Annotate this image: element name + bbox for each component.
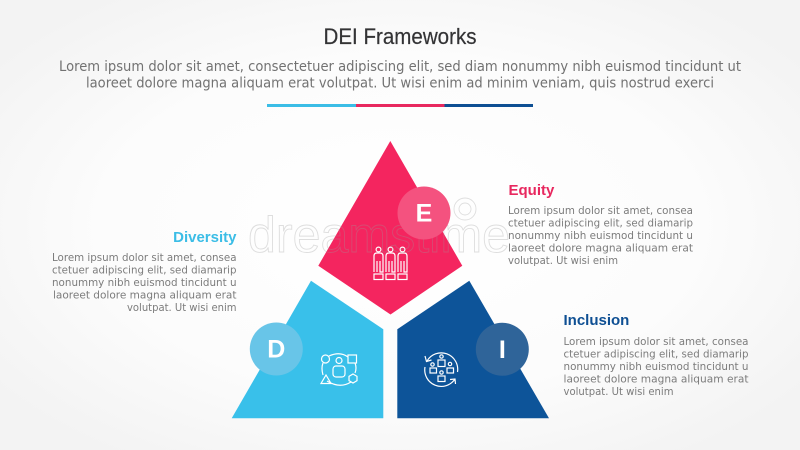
text block: inclusion: Inclusion	[564, 312, 629, 329]
text block: inclusion: volutpat. Ut wisi enim	[564, 386, 674, 398]
text block: equity: nonummy nibh euismod tincidunt u	[508, 230, 693, 242]
text block: inclusion: laoreet dolore magna aliquam erat	[564, 374, 748, 386]
badge: E	[398, 186, 450, 240]
text block: equity: Lorem ipsum dolor sit amet, consea	[508, 205, 693, 217]
subtitle text: laoreet dolore magna aliquam erat volutpat. Ut wisi enim ad minim veniam, quis nostrud exerci	[86, 76, 714, 92]
icon: group in circular arrows	[425, 353, 458, 386]
text block: diversity	[52, 229, 237, 314]
subtitle text	[59, 59, 741, 92]
text block: inclusion: ctetuer adipiscing elit, sed diamarip	[564, 348, 749, 360]
badge: I	[476, 323, 529, 376]
text block: equity: laoreet dolore magna aliquam erat	[508, 242, 693, 254]
icon: three people on blocks	[374, 247, 407, 280]
badge: D: D	[267, 336, 285, 364]
text block: inclusion: nonummy nibh euismod tincidunt u	[564, 361, 748, 373]
title: DEI Frameworks	[324, 24, 476, 49]
icon: shapes around a person	[321, 354, 357, 385]
text block: diversity: Diversity	[173, 229, 237, 246]
text block: equity	[508, 182, 693, 267]
text block: inclusion	[564, 312, 749, 398]
panel: inclusion segment	[397, 281, 549, 418]
text block: diversity: volutpat. Ut wisi enim	[127, 302, 236, 314]
panel: equity segment	[318, 141, 462, 314]
badge: E: E	[416, 200, 432, 228]
text block: diversity: ctetuer adipiscing elit, sed diamarip	[52, 264, 237, 276]
tri-colour divider	[267, 104, 533, 107]
panel: diversity segment	[232, 281, 383, 418]
text block: equity: ctetuer adipiscing elit, sed diamarip	[508, 218, 693, 230]
text block: diversity: Lorem ipsum dolor sit amet, consea	[52, 252, 236, 264]
text block: diversity: laoreet dolore magna aliquam erat	[53, 290, 236, 302]
text block: diversity: nonummy nibh euismod tincidunt u	[52, 277, 236, 289]
watermark: dreamstime	[248, 207, 510, 263]
badge: D	[250, 322, 303, 376]
text block: inclusion: Lorem ipsum dolor sit amet, consea	[564, 336, 748, 348]
text block: equity: Equity	[508, 182, 555, 199]
subtitle text: Lorem ipsum dolor sit amet, consectetuer adipiscing elit, sed diam nonummy nibh euismod tincidunt ut	[59, 59, 741, 75]
badge: I: I	[499, 336, 506, 364]
text block: equity: volutpat. Ut wisi enim	[508, 255, 618, 267]
